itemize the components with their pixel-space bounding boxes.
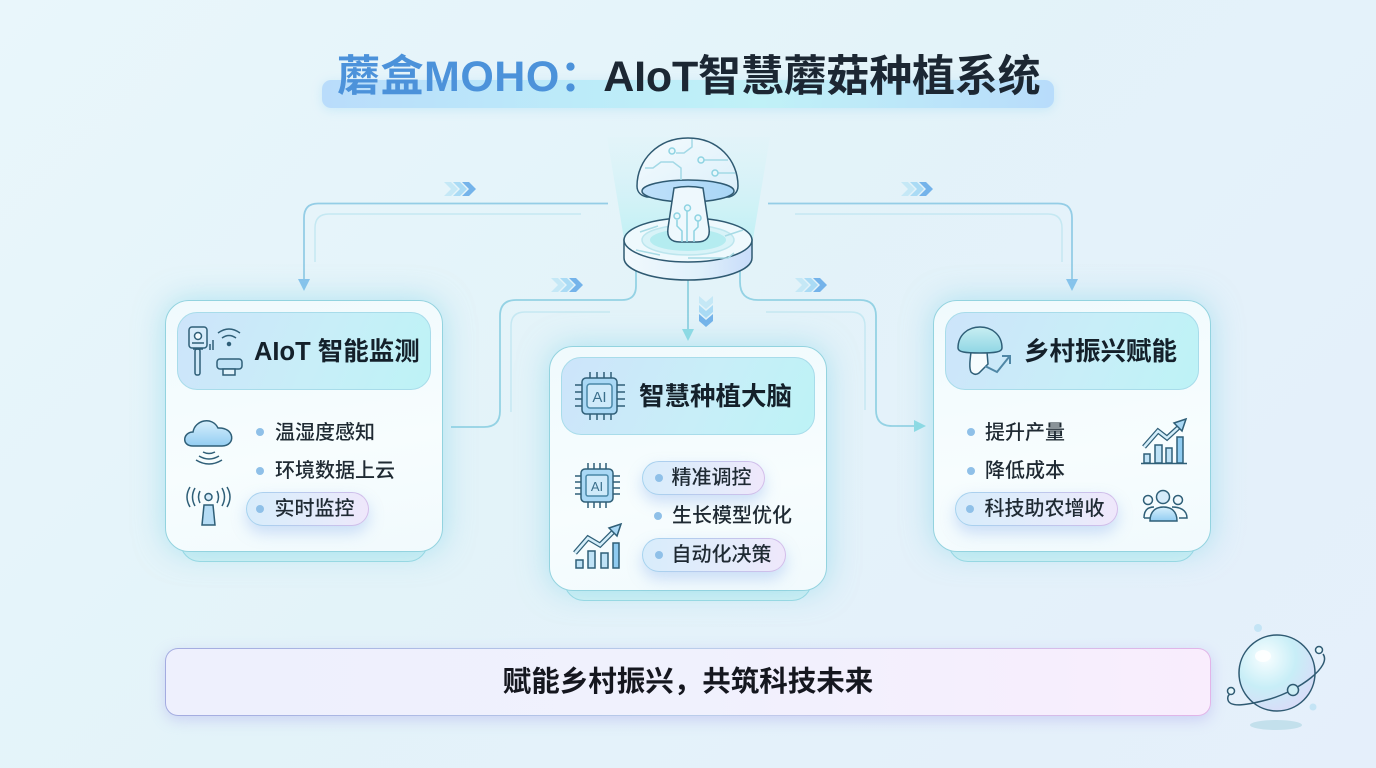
list item: temperature and humidity sensing: 温湿度感知 [275,422,375,444]
icon: signal tower [186,486,231,526]
icon: AI chip small: AI [591,479,603,494]
icon: rising bar chart [1141,418,1188,464]
icon: mushroom with arrow [957,326,1011,376]
list item: growth model optimisation: 生长模型优化 [672,505,792,527]
list item: environment data upload: 环境数据上云 [275,460,395,482]
panel header: smart planting brain [561,357,815,435]
list item: raise yield: 提升产量 [985,422,1065,444]
icon: AI chip large: AI [592,389,607,406]
title: 蘑盒MOHO：AIoT智慧蘑菇种植系统 [337,53,1040,101]
header text: AIoT smart monitoring: AIoT 智能监测 [254,338,420,366]
panel header: rural revitalisation [945,312,1199,390]
highlighted item: precise control: 精准调控 [672,467,752,489]
panel: smart planting brain [532,330,844,608]
title highlight bar [322,80,1054,108]
highlighted item: real-time monitoring [246,492,369,526]
icon: AI chip large [575,372,625,420]
panel: rural revitalisation [916,284,1228,568]
icon: farmers group [1142,490,1188,522]
panel: AIoT monitoring [148,284,460,568]
highlighted item: tech helps farmers earn more: 科技助农增收 [984,498,1104,520]
icon: cloud upload [184,420,232,465]
icon: AI chip small [575,463,620,508]
highlighted item: automated decisions: 自动化决策 [672,544,772,566]
highlighted item: automated decisions [642,538,786,572]
icon: tech globe with orbit [1226,624,1326,730]
list item: lower cost: 降低成本 [985,460,1065,482]
highlighted item: tech helps farmers earn more [955,492,1118,526]
header text: rural revitalisation empowerment: 乡村振兴赋能 [1024,338,1177,366]
icon: growth chart [573,522,622,569]
header text: smart planting brain: 智慧种植大脑 [639,383,792,411]
highlighted item: real-time monitoring: 实时监控 [274,498,354,520]
banner: slogan [165,648,1211,716]
icon: sensor, wifi and gateway [188,326,243,376]
panel header: AIoT monitoring [177,312,431,390]
highlighted item: precise control [642,461,765,495]
banner: slogan: 赋能乡村振兴，共筑科技未来 [503,666,873,698]
